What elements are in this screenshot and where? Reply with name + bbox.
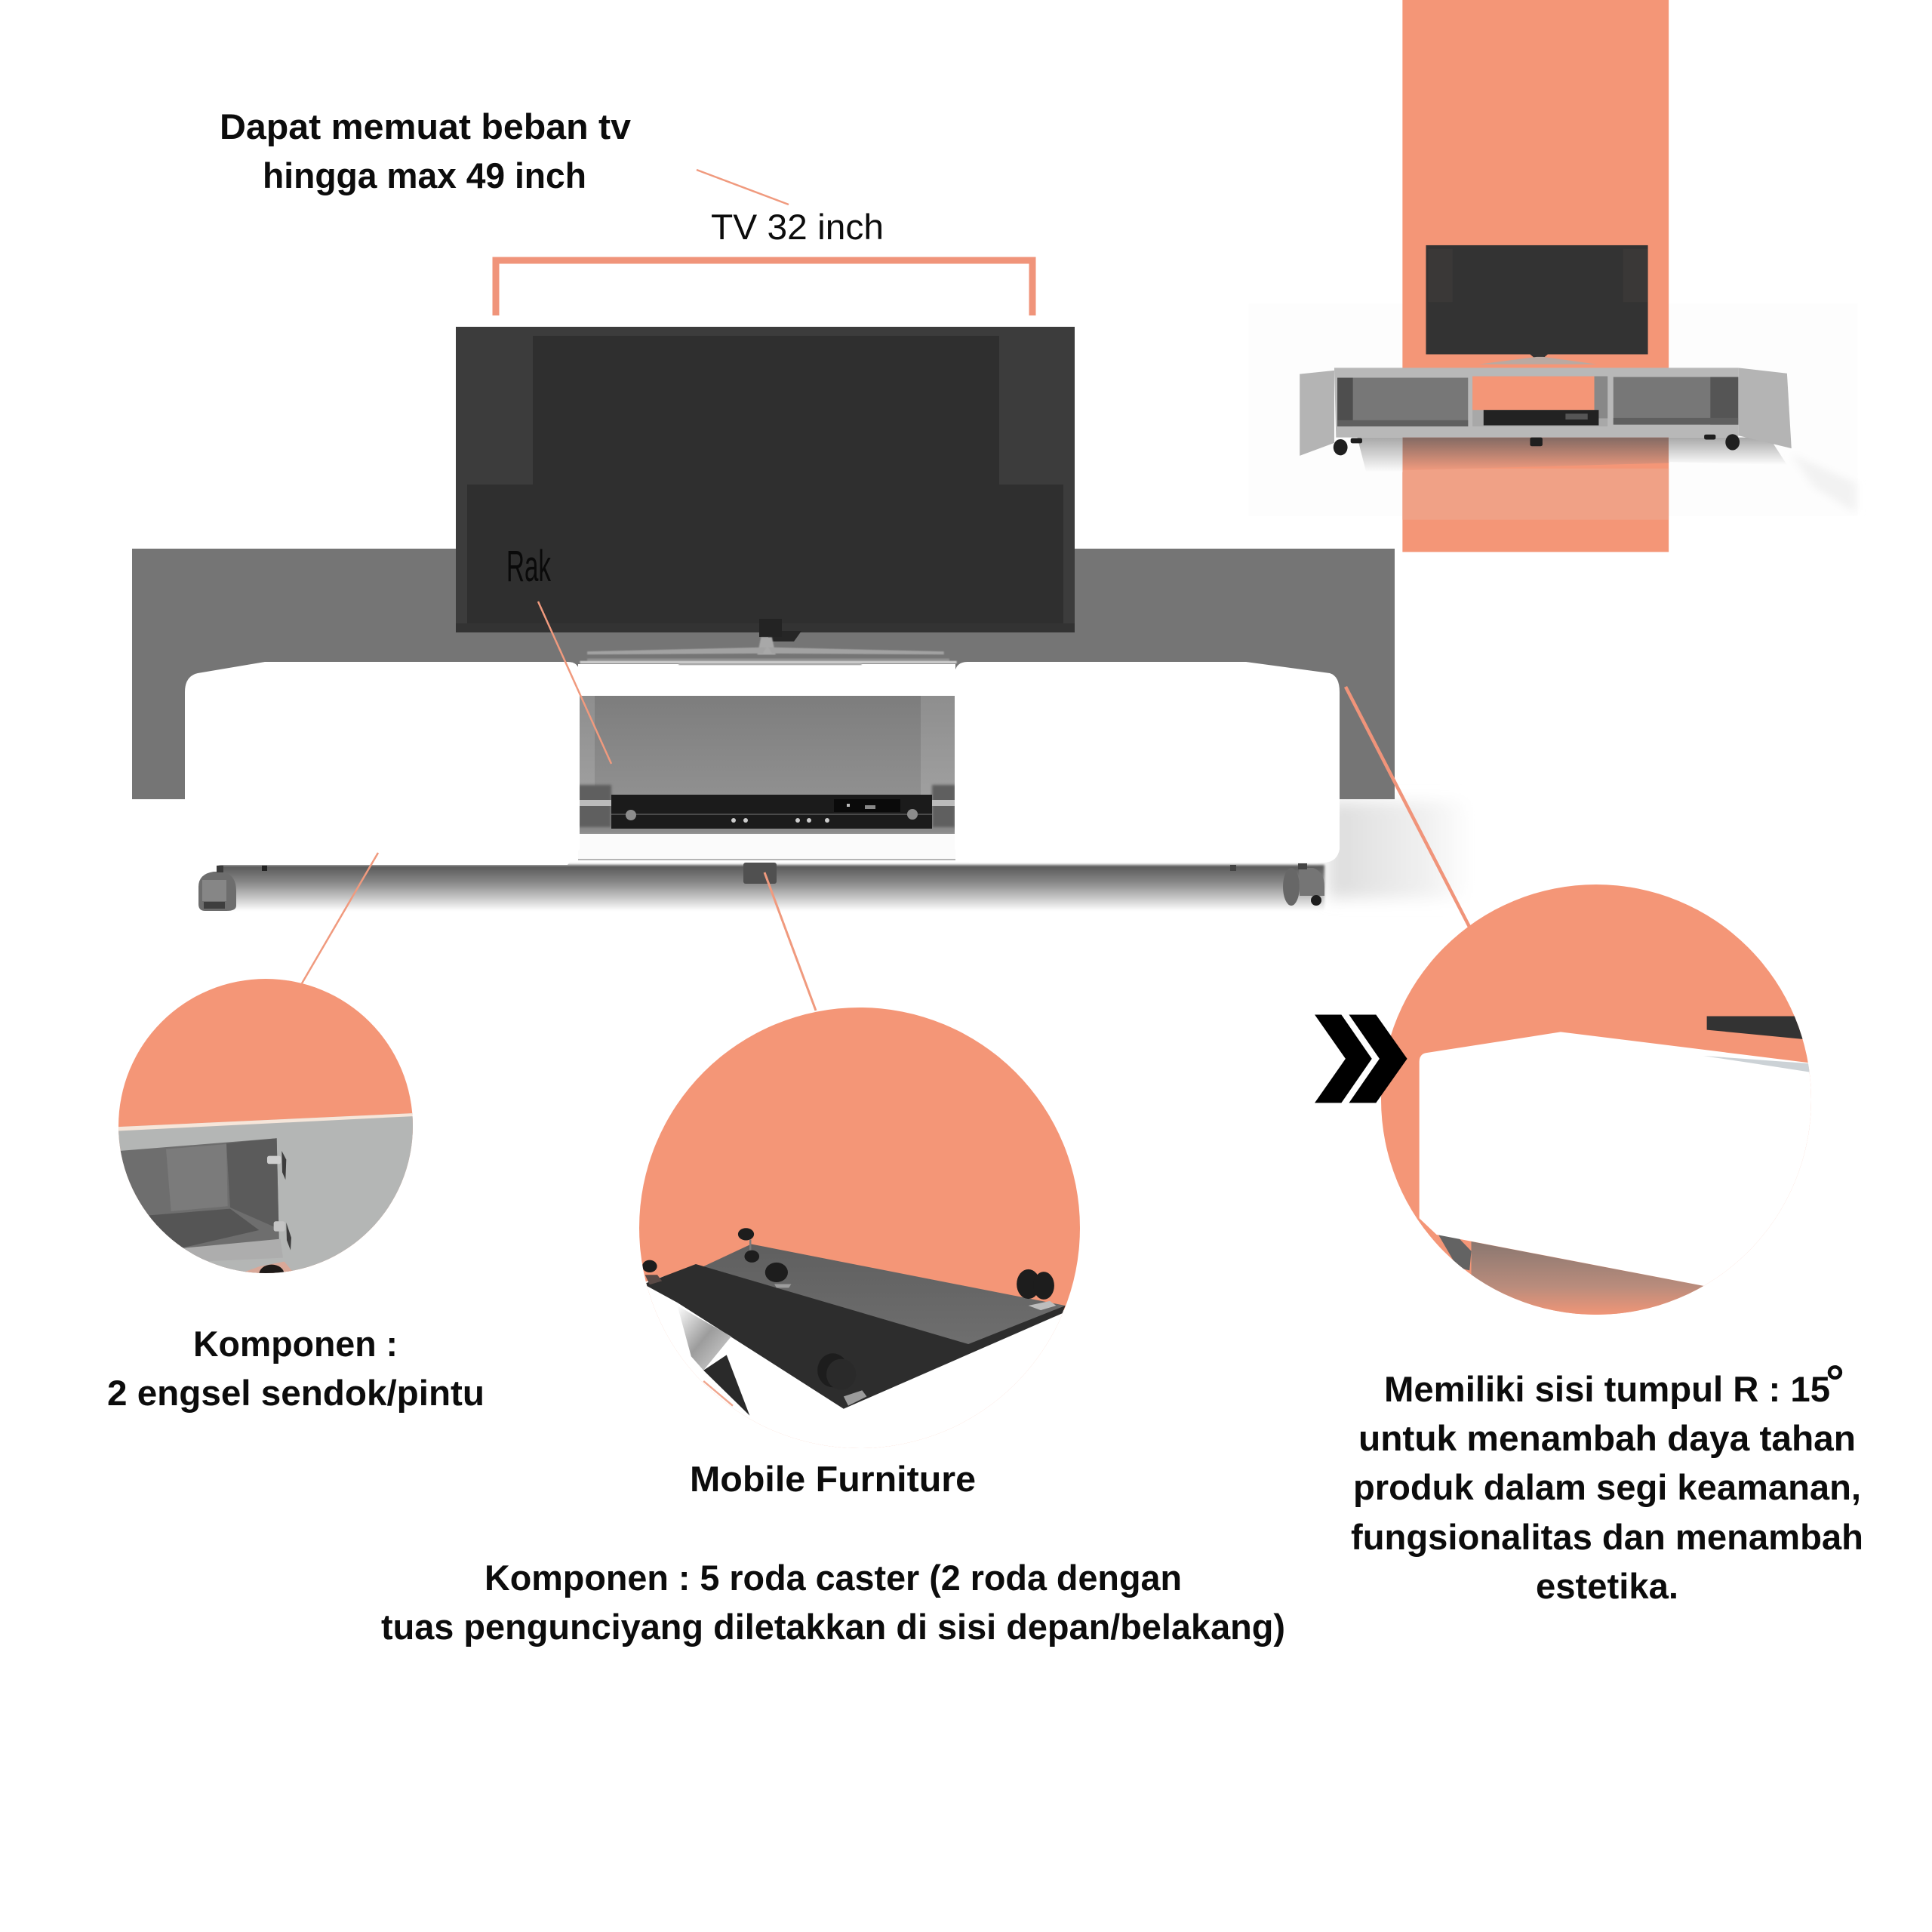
wheel fragment — [259, 1265, 284, 1273]
leader line: caster — [764, 872, 816, 1011]
leader line: door — [302, 853, 378, 983]
floor shadow — [219, 865, 1324, 910]
caption: caster component — [381, 1558, 1285, 1647]
panel: main product view — [132, 327, 1472, 911]
circle fill — [639, 1008, 1080, 1448]
icon: double chevron — [1315, 1014, 1407, 1103]
caption: hinge: Komponen : — [193, 1324, 398, 1364]
caption: caster component: Komponen : 5 roda caster (2 roda dengan — [485, 1558, 1182, 1598]
caption: rounded edge — [1351, 1356, 1863, 1606]
small television — [1426, 245, 1648, 365]
caption: rounded edge: estetika. — [1536, 1566, 1678, 1606]
dvd player — [611, 795, 932, 829]
caption: mobile furniture: Mobile Furniture — [690, 1459, 976, 1499]
orange column — [1402, 0, 1669, 552]
heading: tv load — [220, 106, 631, 195]
heading: tv load: hingga max 49 inch — [263, 155, 586, 195]
hinges — [267, 1151, 291, 1251]
leader line: rounded edge — [1346, 687, 1469, 927]
cabinet shadow — [1357, 438, 1856, 512]
caption: hinge: 2 engsel sendok/pintu — [107, 1373, 485, 1413]
white cabinet body — [646, 1275, 1064, 1448]
caption: rounded edge: produk dalam segi keamanan, — [1353, 1467, 1861, 1507]
television — [456, 327, 1075, 641]
wheels — [1334, 434, 1740, 455]
infographic canvas — [109, 0, 1861, 1647]
underside panel — [702, 1244, 1066, 1353]
side floor shadow — [1328, 801, 1472, 898]
panel: caster detail circle — [639, 1008, 1080, 1448]
circle fill — [118, 979, 413, 1273]
width bracket — [496, 260, 1032, 315]
leader line: tv size — [697, 170, 789, 205]
caption: caster component: tuas pengunciyang diletakkan di sisi depan/belakang) — [381, 1607, 1285, 1647]
panel: rounded edge detail circle — [1381, 884, 1811, 1315]
cabinet door — [118, 1113, 413, 1273]
right door — [955, 662, 1340, 863]
shelf shadow — [1472, 1241, 1705, 1317]
open shelf — [578, 664, 955, 860]
casters — [198, 863, 1324, 911]
leader line: rak — [538, 601, 611, 764]
caster wheels — [642, 1228, 1056, 1406]
label: tv 32 inch: TV 32 inch — [711, 207, 884, 247]
open shelf section — [678, 1306, 749, 1416]
caption: rounded edge: Memiliki sisi tumpul R : 15 — [1384, 1369, 1830, 1409]
image backdrop — [1249, 304, 1858, 516]
cabinet interior — [121, 1138, 291, 1273]
caster — [1438, 1235, 1472, 1270]
open cabinet — [1300, 368, 1792, 456]
circle fill — [1381, 884, 1811, 1315]
panel: open-door view — [1249, 0, 1858, 552]
heading: tv load: Dapat memuat beban tv — [220, 106, 631, 146]
panel: hinge detail circle — [118, 979, 413, 1273]
reflection on floor — [1402, 469, 1669, 520]
grey backdrop band — [132, 549, 1395, 799]
white cabinet corner — [1420, 1032, 1817, 1322]
tv base — [1707, 1016, 1805, 1039]
label: rak: Rak — [506, 542, 552, 591]
highlight strip — [1703, 1056, 1814, 1072]
tv stand — [580, 637, 957, 665]
caption: rounded edge: ° — [1826, 1356, 1844, 1408]
left door — [185, 662, 580, 865]
dark base — [644, 1264, 1066, 1409]
caption: rounded edge: untuk menambah daya tahan — [1358, 1418, 1856, 1458]
caption: hinge — [107, 1324, 485, 1413]
caption: rounded edge: fungsionalitas dan menambah — [1351, 1517, 1863, 1557]
